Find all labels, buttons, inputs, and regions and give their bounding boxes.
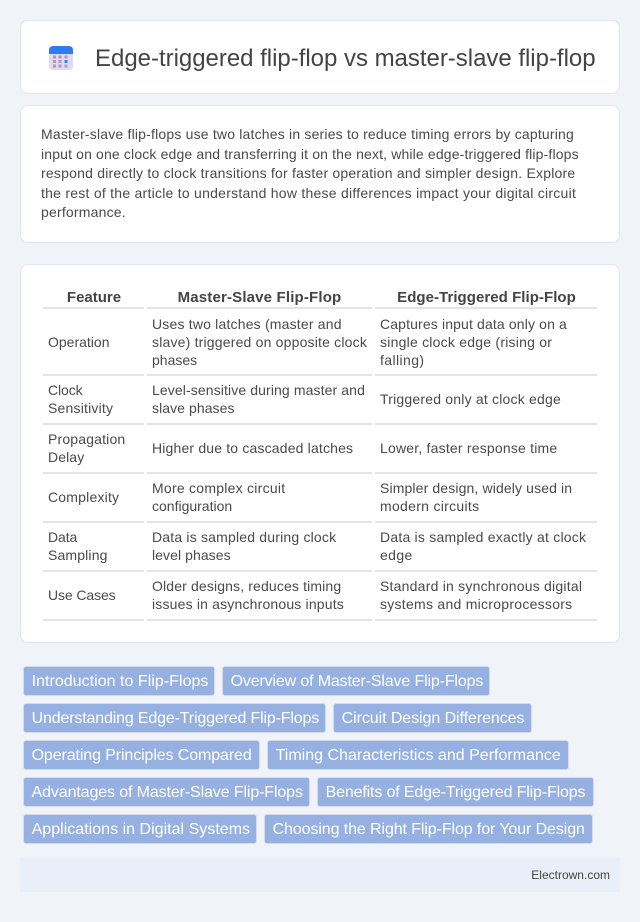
panel: intro <box>20 105 620 243</box>
title: Edge-triggered flip-flop vs master-slave flip-flop <box>95 45 596 72</box>
footer source text: Electrown.com <box>531 868 610 882</box>
row: Operation <box>48 316 567 368</box>
row: Operation: Captures input data only on a <box>380 316 567 332</box>
row: Use Cases: issues in asynchronous inputs <box>152 596 344 612</box>
row: Data Sampling: Data is sampled during clock <box>152 529 336 545</box>
row: Propagation Delay: Delay <box>48 449 84 465</box>
panel: header <box>20 20 620 94</box>
row: Complexity: Simpler design, widely used in <box>380 480 572 496</box>
tag <box>222 666 490 696</box>
row: Operation: slave) triggered on opposite clock <box>152 334 367 350</box>
tag <box>267 740 569 770</box>
tag: Applications in Digital Systems <box>32 821 250 838</box>
table header: Feature <box>67 289 121 306</box>
row: Data Sampling: edge <box>380 547 413 563</box>
row: Data Sampling: Data <box>48 529 77 545</box>
row: Data Sampling: level phases <box>152 547 231 563</box>
tag <box>23 703 326 733</box>
row: Data Sampling: Data is sampled exactly at clock <box>380 529 586 545</box>
tag: Understanding Edge-Triggered Flip-Flops <box>32 710 319 727</box>
row: Propagation Delay <box>48 431 557 465</box>
tag: Operating Principles Compared <box>32 747 252 764</box>
tag: Advantages of Master-Slave Flip-Flops <box>32 784 303 801</box>
row: Operation: single clock edge (rising or <box>380 334 552 350</box>
tag <box>333 703 532 733</box>
row: Clock Sensitivity: Clock <box>48 382 83 398</box>
row: Clock Sensitivity <box>48 382 561 416</box>
row: Complexity: configuration <box>152 498 232 514</box>
tag: Introduction to Flip-Flops <box>32 673 208 690</box>
panel: comparison table <box>20 264 620 643</box>
tag <box>23 814 257 844</box>
tag: Overview of Master-Slave Flip-Flops <box>231 673 483 690</box>
row: Complexity: Complexity <box>48 489 119 505</box>
tag: Timing Characteristics and Performance <box>276 747 561 764</box>
tag <box>264 814 593 844</box>
row: Use Cases: systems and microprocessors <box>380 596 572 612</box>
text: intro paragraph: respond directly to clock transitions for faster operation and simpler design. Explore <box>41 165 575 181</box>
text: intro paragraph: input on one clock edge and transferring it on the next, while edge-triggered flip-flops <box>41 146 579 162</box>
row: Use Cases: Use Cases <box>48 587 116 603</box>
row: Use Cases: Older designs, reduces timing <box>152 578 341 594</box>
tag <box>23 740 260 770</box>
row: Complexity: More complex circuit <box>152 480 285 496</box>
row: Operation: Uses two latches (master and <box>152 316 342 332</box>
table header: Edge-Triggered Flip-Flop <box>397 289 576 306</box>
tag: Circuit Design Differences <box>342 710 524 727</box>
table header: Master-Slave Flip-Flop <box>178 289 341 306</box>
row: Propagation Delay: Lower, faster response time <box>380 440 557 456</box>
tag: Choosing the Right Flip-Flop for Your Design <box>273 821 585 838</box>
tag: Benefits of Edge-Triggered Flip-Flops <box>326 784 585 801</box>
row: Propagation Delay: Propagation <box>48 431 125 447</box>
row: Complexity: modern circuits <box>380 498 479 514</box>
row: Operation: phases <box>152 352 197 368</box>
row: Data Sampling <box>48 529 586 563</box>
table header <box>67 289 576 306</box>
row: Complexity <box>48 480 572 514</box>
text: intro paragraph <box>41 126 579 220</box>
text: intro paragraph: Master-slave flip-flops use two latches in series to reduce timing errors by capturing <box>41 126 574 142</box>
row: Clock Sensitivity: Triggered only at clock edge <box>380 391 561 407</box>
row: Use Cases: Standard in synchronous digital <box>380 578 582 594</box>
row: Clock Sensitivity: Sensitivity <box>48 400 113 416</box>
row: Clock Sensitivity: slave phases <box>152 400 235 416</box>
footer <box>20 858 620 892</box>
row: Clock Sensitivity: Level-sensitive during master and <box>152 382 365 398</box>
tag <box>23 777 310 807</box>
tag <box>23 666 215 696</box>
row: Data Sampling: Sampling <box>48 547 108 563</box>
row: Operation: Operation <box>48 334 109 350</box>
row: Propagation Delay: Higher due to cascaded latches <box>152 440 353 456</box>
icon: calendar <box>49 46 73 70</box>
row: Operation: falling) <box>380 352 424 368</box>
text: intro paragraph: the rest of the article to understand how these differences impact your digital circuit <box>41 185 576 201</box>
tag <box>317 777 594 807</box>
row: Use Cases <box>48 578 582 612</box>
text: intro paragraph: performance. <box>41 204 126 220</box>
tag list <box>23 666 594 844</box>
